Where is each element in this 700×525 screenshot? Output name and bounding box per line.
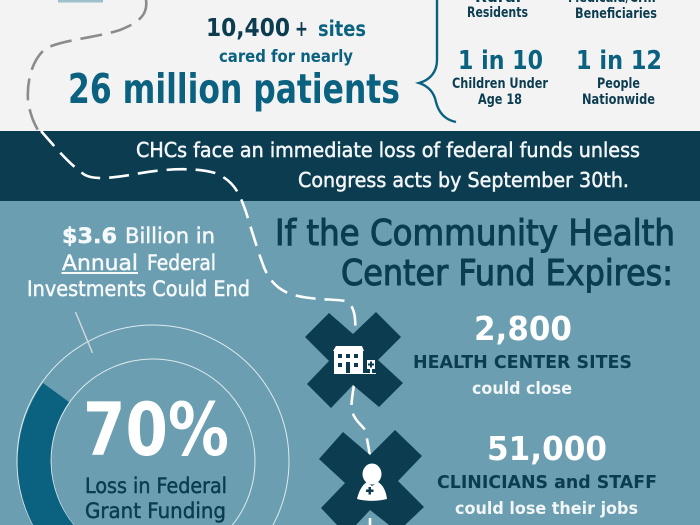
text: annual federal investments: Investments Could End (27, 277, 250, 301)
text: 26 million patients: 26 million patients (68, 65, 400, 113)
stat: people nationwide (576, 46, 662, 108)
stat: medicaid and CHIP beneficiaries: Beneficiaries (575, 6, 657, 22)
icon: X with clinician (319, 430, 424, 525)
text: sites count (206, 13, 366, 42)
callout tick (76, 312, 92, 353)
text: loss in federal grant funding: Loss in Federal (85, 474, 227, 498)
text: sites count: 10,400 (206, 13, 290, 42)
stat: people nationwide: People (597, 76, 640, 92)
stat: rural residents: Residents (467, 5, 528, 21)
panel: top patient statistics (0, 0, 700, 131)
chart segment: dark arc (18, 383, 74, 525)
stat: people nationwide: Nationwide (582, 92, 655, 108)
icon: curly brace (419, 0, 456, 122)
stat: sites could close: HEALTH CENTER SITES (413, 352, 632, 373)
icon: clinician (357, 464, 387, 501)
stat: clinicians could lose jobs: could lose their jobs (455, 499, 638, 519)
heading: if the fund expires (275, 213, 675, 294)
text: loss in federal grant funding: Grant Funding (85, 499, 226, 523)
text: sites count: sites (318, 17, 366, 41)
panel: lower background (0, 201, 700, 525)
stat: sites could close: could close (472, 379, 572, 399)
stat: clinicians could lose jobs: 51,000 (487, 429, 607, 468)
text: annual federal investments (27, 224, 250, 301)
text: annual federal investments: Federal (147, 251, 216, 275)
stat: children under 18: Children Under (452, 76, 548, 92)
text: loss in federal grant funding (85, 474, 227, 523)
text: warning message (136, 138, 640, 192)
stat: children under 18: Age 18 (478, 92, 522, 108)
stat: clinicians could lose jobs: CLINICIANS and STAFF (437, 472, 657, 493)
text: cared for nearly: cared for nearly (219, 47, 353, 67)
stat: children under 18 (452, 46, 548, 108)
panel: warning band (0, 131, 700, 201)
text: annual federal investments: Annual (62, 251, 138, 275)
stat: medicaid and CHIP beneficiaries (568, 0, 660, 22)
stat: children under 18: 1 in 10 (458, 46, 543, 76)
stat: sites could close (413, 309, 632, 399)
stat: clinicians could lose jobs (437, 429, 657, 519)
arrow: dashed path lower white (41, 131, 371, 525)
stat: sites could close: 2,800 (474, 309, 572, 348)
text: warning message: CHCs face an immediate loss of federal funds unless (136, 138, 640, 162)
text: annual federal investments: Billion in (125, 224, 215, 248)
stat: people nationwide: 1 in 12 (576, 46, 662, 76)
chart: 70 percent donut (17, 312, 289, 525)
cropped legend swatch (58, 0, 103, 2)
text: sites count: + (295, 17, 308, 42)
icon: building (333, 346, 376, 374)
text: warning message: Congress acts by September 30th. (298, 168, 629, 192)
arrow: dashed path upper grey (28, 0, 146, 130)
stat: rural residents (467, 0, 528, 21)
icon: X with health center building (305, 312, 403, 408)
text: annual federal investments: $3.6 (62, 224, 117, 248)
text: 70 percent: 70% (83, 388, 229, 473)
